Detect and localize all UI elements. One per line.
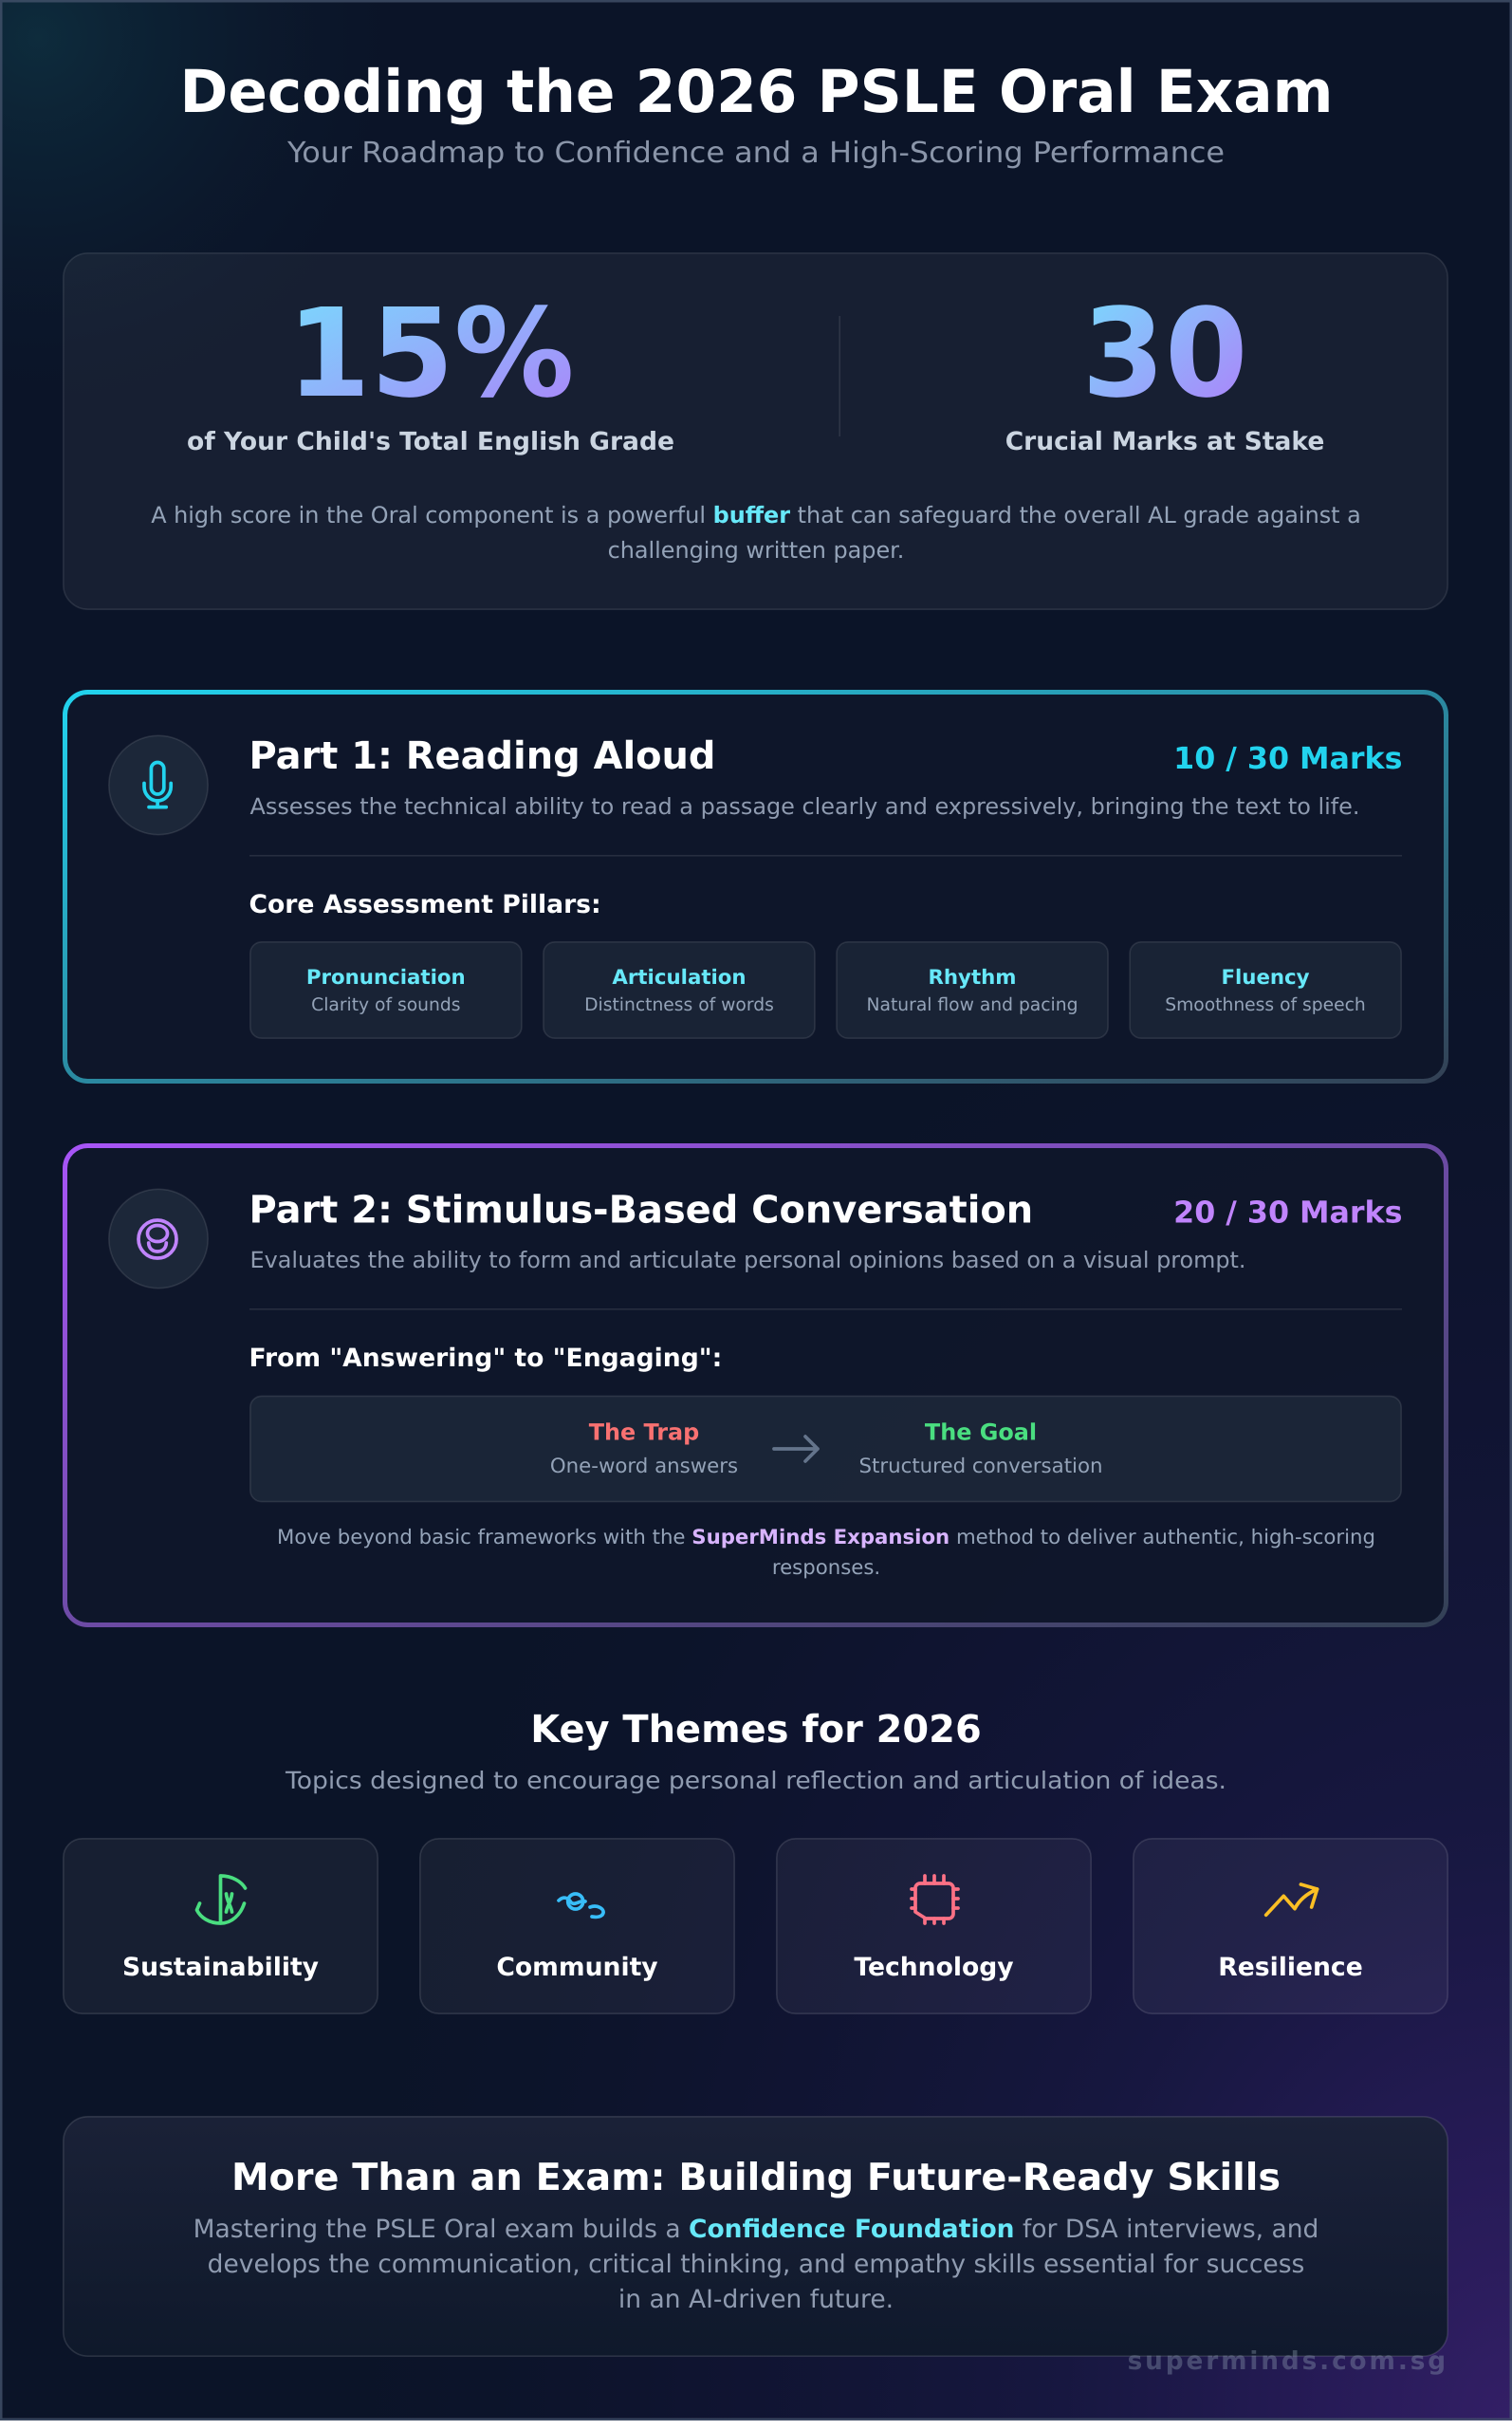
pillar: rhythm [837, 942, 1108, 1038]
title: Decoding the 2026 PSLE Oral Exam [180, 57, 1334, 126]
panel: future-ready skills [64, 2117, 1447, 2356]
superminds note: Move beyond basic frameworks with the SuperMinds Expansion method to deliver authentic, high-scoring [277, 1526, 1375, 1549]
buffer explanation [151, 502, 1361, 564]
arrow [774, 1437, 818, 1461]
future-ready body: in an AI-driven future. [618, 2285, 894, 2314]
pillars heading: Core Assessment Pillars: [249, 890, 601, 919]
theme card: resilience [1134, 1839, 1447, 2013]
stat: 15 percent [187, 283, 674, 456]
part 2 heading: Part 2: Stimulus-Based Conversation [249, 1188, 1033, 1232]
engaging heading: From "Answering" to "Engaging": [249, 1344, 722, 1373]
icon: rising arrow [1266, 1884, 1318, 1915]
pillar: pronunciation: Clarity of sounds [311, 995, 460, 1015]
part 2 marks: 20 / 30 Marks [1173, 1196, 1402, 1230]
pillar: fluency: Fluency [1221, 966, 1310, 990]
pillar: fluency: Smoothness of speech [1165, 995, 1366, 1015]
stat: 30 marks: Crucial Marks at Stake [1005, 427, 1324, 456]
subtitle: Your Roadmap to Confidence and a High-Scoring Performance [286, 137, 1225, 170]
the trap: The Trap [589, 1419, 699, 1446]
section heading: key themes [285, 1708, 1226, 1794]
theme card: community: Community [496, 1953, 658, 1982]
panel: part 1 reading aloud [65, 693, 1446, 1082]
pillar: rhythm: Natural flow and pacing [867, 995, 1078, 1015]
future-ready body: develops the communication, critical thinking, and empathy skills essential for success [208, 2250, 1304, 2279]
pillar: articulation [544, 942, 815, 1038]
icon: microphone [109, 735, 208, 835]
stat: 15 percent: 15% [286, 283, 575, 425]
superminds note [277, 1526, 1375, 1580]
icon: chip [912, 1876, 958, 1923]
theme card: sustainability [64, 1839, 378, 2013]
theme card: technology [777, 1839, 1091, 2013]
icon: leaf [197, 1876, 245, 1923]
the trap [550, 1419, 738, 1478]
part 1 heading: Part 1: Reading Aloud [249, 734, 715, 778]
section heading: key themes: Key Themes for 2026 [530, 1708, 982, 1752]
the goal [859, 1419, 1102, 1478]
pillar: articulation: Articulation [612, 966, 747, 990]
stat: 30 marks [1005, 283, 1324, 456]
pillar: rhythm: Rhythm [929, 966, 1016, 990]
stat: 15 percent: of Your Child's Total English Grade [187, 428, 674, 456]
the trap: One-word answers [550, 1455, 738, 1478]
pillar: pronunciation: Pronunciation [306, 966, 466, 990]
theme card: sustainability: Sustainability [122, 1953, 319, 1982]
future-ready body: Mastering the PSLE Oral exam builds a Confidence Foundation for DSA interviews, and [194, 2215, 1318, 2244]
future-ready heading: More Than an Exam: Building Future-Ready Skills [231, 2156, 1281, 2199]
icon: speaker ring [109, 1189, 208, 1289]
buffer explanation: challenging written paper. [608, 537, 904, 564]
part 1 description: Assesses the technical ability to read a passage clearly and expressively, bringing the text to life. [250, 793, 1360, 820]
section heading: key themes: Topics designed to encourage personal reflection and articulation of ideas. [285, 1767, 1226, 1794]
pillar: pronunciation [250, 942, 522, 1038]
panel: part 2 stimulus-based conversation [65, 1146, 1446, 1624]
watermark: superminds.com.sg [1128, 2347, 1448, 2376]
header [180, 57, 1334, 170]
future-ready body [194, 2215, 1318, 2314]
theme card: community [420, 1839, 734, 2013]
superminds note: responses. [772, 1556, 880, 1580]
the goal: Structured conversation [859, 1455, 1102, 1478]
theme card: technology: Technology [854, 1953, 1014, 1982]
pillar: articulation: Distinctness of words [584, 995, 774, 1015]
panel: key statistics [64, 253, 1447, 609]
theme card: resilience: Resilience [1218, 1953, 1363, 1982]
the goal: The Goal [925, 1419, 1037, 1446]
part 1 marks: 10 / 30 Marks [1173, 742, 1402, 776]
trap to goal comparison [250, 1396, 1401, 1502]
icon: people [559, 1894, 603, 1917]
stat: 30 marks: 30 [1081, 283, 1248, 425]
pillar: fluency [1130, 942, 1401, 1038]
part 2 description: Evaluates the ability to form and articulate personal opinions based on a visual prompt. [250, 1247, 1246, 1273]
buffer explanation: A high score in the Oral component is a powerful buffer that can safeguard the overall AL grade against a [151, 502, 1361, 528]
